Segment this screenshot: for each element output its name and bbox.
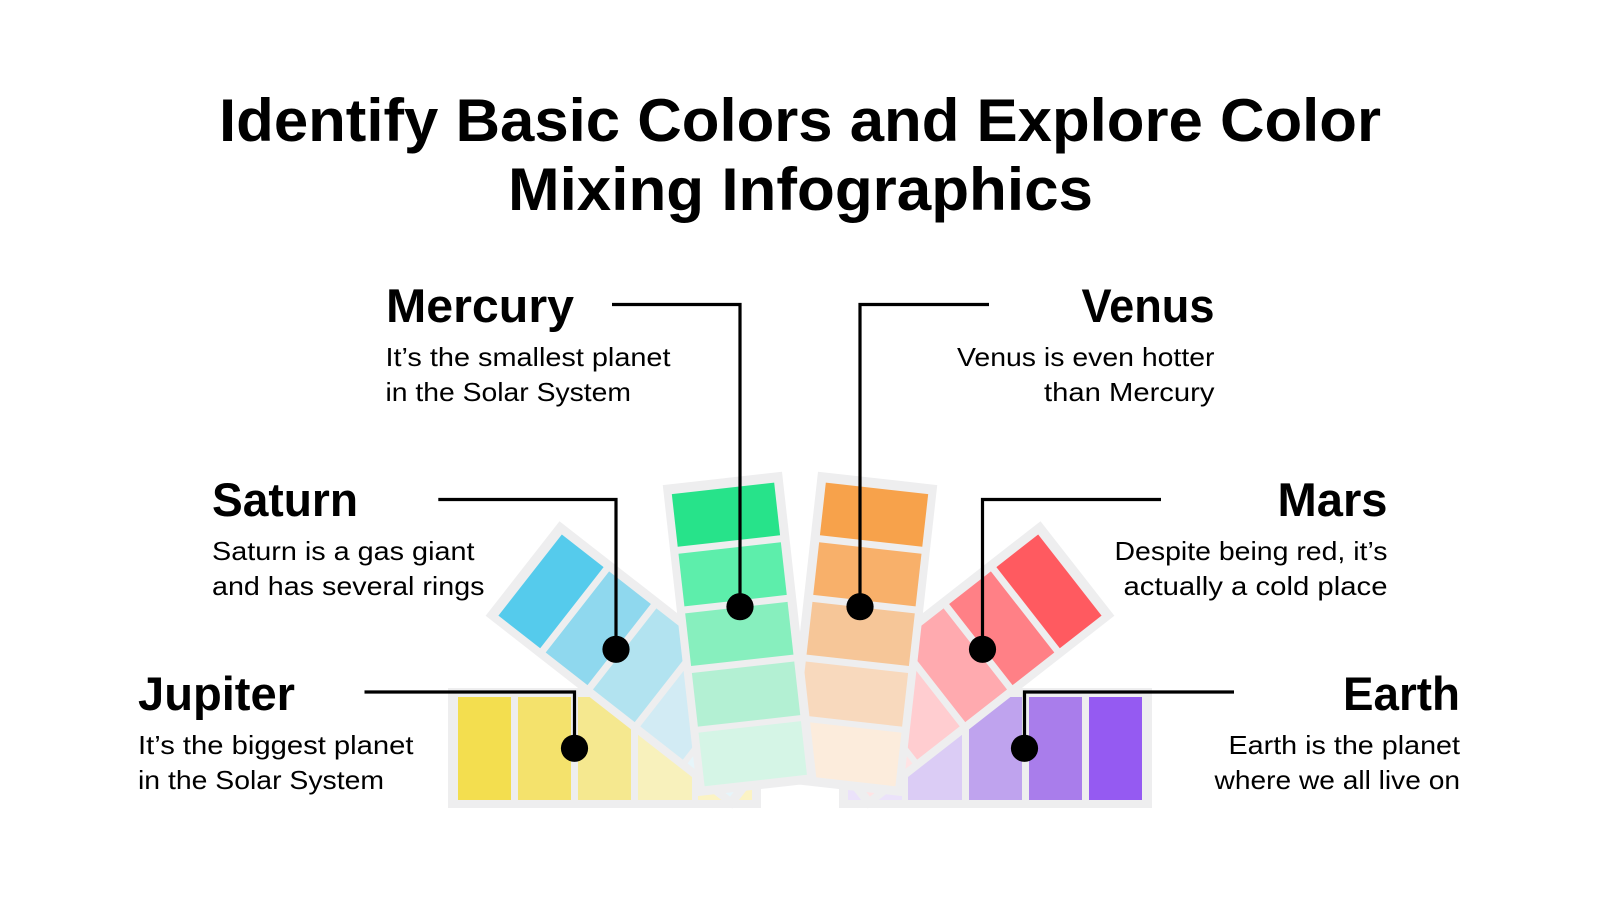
swatch strip: orange: [783, 472, 937, 796]
label: Mercury: It’s the smallest planet: [386, 342, 671, 372]
callout line: Venus: [846, 304, 989, 620]
label: Saturn: Saturn: [212, 473, 358, 526]
label: Venus: than Mercury: [1044, 377, 1214, 407]
label: Saturn: [212, 473, 484, 601]
callout line: Saturn: [438, 500, 630, 663]
label: Mercury: in the Solar System: [386, 377, 631, 407]
label: Jupiter: [138, 667, 414, 795]
label: Mars: actually a cold place: [1124, 571, 1388, 601]
title: [219, 87, 1381, 223]
callout line: Mercury: [612, 304, 754, 620]
label: Mars: Despite being red, it’s: [1114, 536, 1388, 566]
swatch strip: purple: [839, 688, 1152, 808]
callout line: Mars: [969, 500, 1161, 663]
callout line: Jupiter: [364, 692, 588, 762]
color fan chart: [448, 472, 1152, 808]
label: Earth: where we all live on: [1213, 765, 1460, 795]
title: Identify Basic Colors and Explore Color: [219, 87, 1381, 154]
label: Venus: Venus: [1082, 279, 1214, 332]
label: Venus: [957, 279, 1215, 407]
swatch strip: yellow: [448, 688, 761, 808]
label: Jupiter: in the Solar System: [138, 765, 384, 795]
label: Mercury: [386, 279, 671, 407]
label: Jupiter: It’s the biggest planet: [138, 730, 414, 760]
swatch strip: green: [663, 472, 817, 796]
label: Earth: [1213, 667, 1461, 795]
callout line: Earth: [1011, 692, 1234, 762]
label: Mars: Mars: [1278, 473, 1388, 526]
label: Earth: Earth is the planet: [1228, 730, 1461, 760]
label: Venus: Venus is even hotter: [957, 342, 1215, 372]
swatch strip: blue: [486, 521, 806, 808]
label: Mars: [1114, 473, 1388, 601]
title: Mixing Infographics: [508, 156, 1093, 223]
label: Mercury: Mercury: [386, 279, 574, 332]
label: Jupiter: Jupiter: [138, 667, 295, 720]
label: Earth: Earth: [1343, 667, 1460, 720]
label: Saturn: Saturn is a gas giant: [212, 536, 475, 566]
label: Saturn: and has several rings: [212, 571, 484, 601]
swatch strip: red: [794, 521, 1114, 808]
